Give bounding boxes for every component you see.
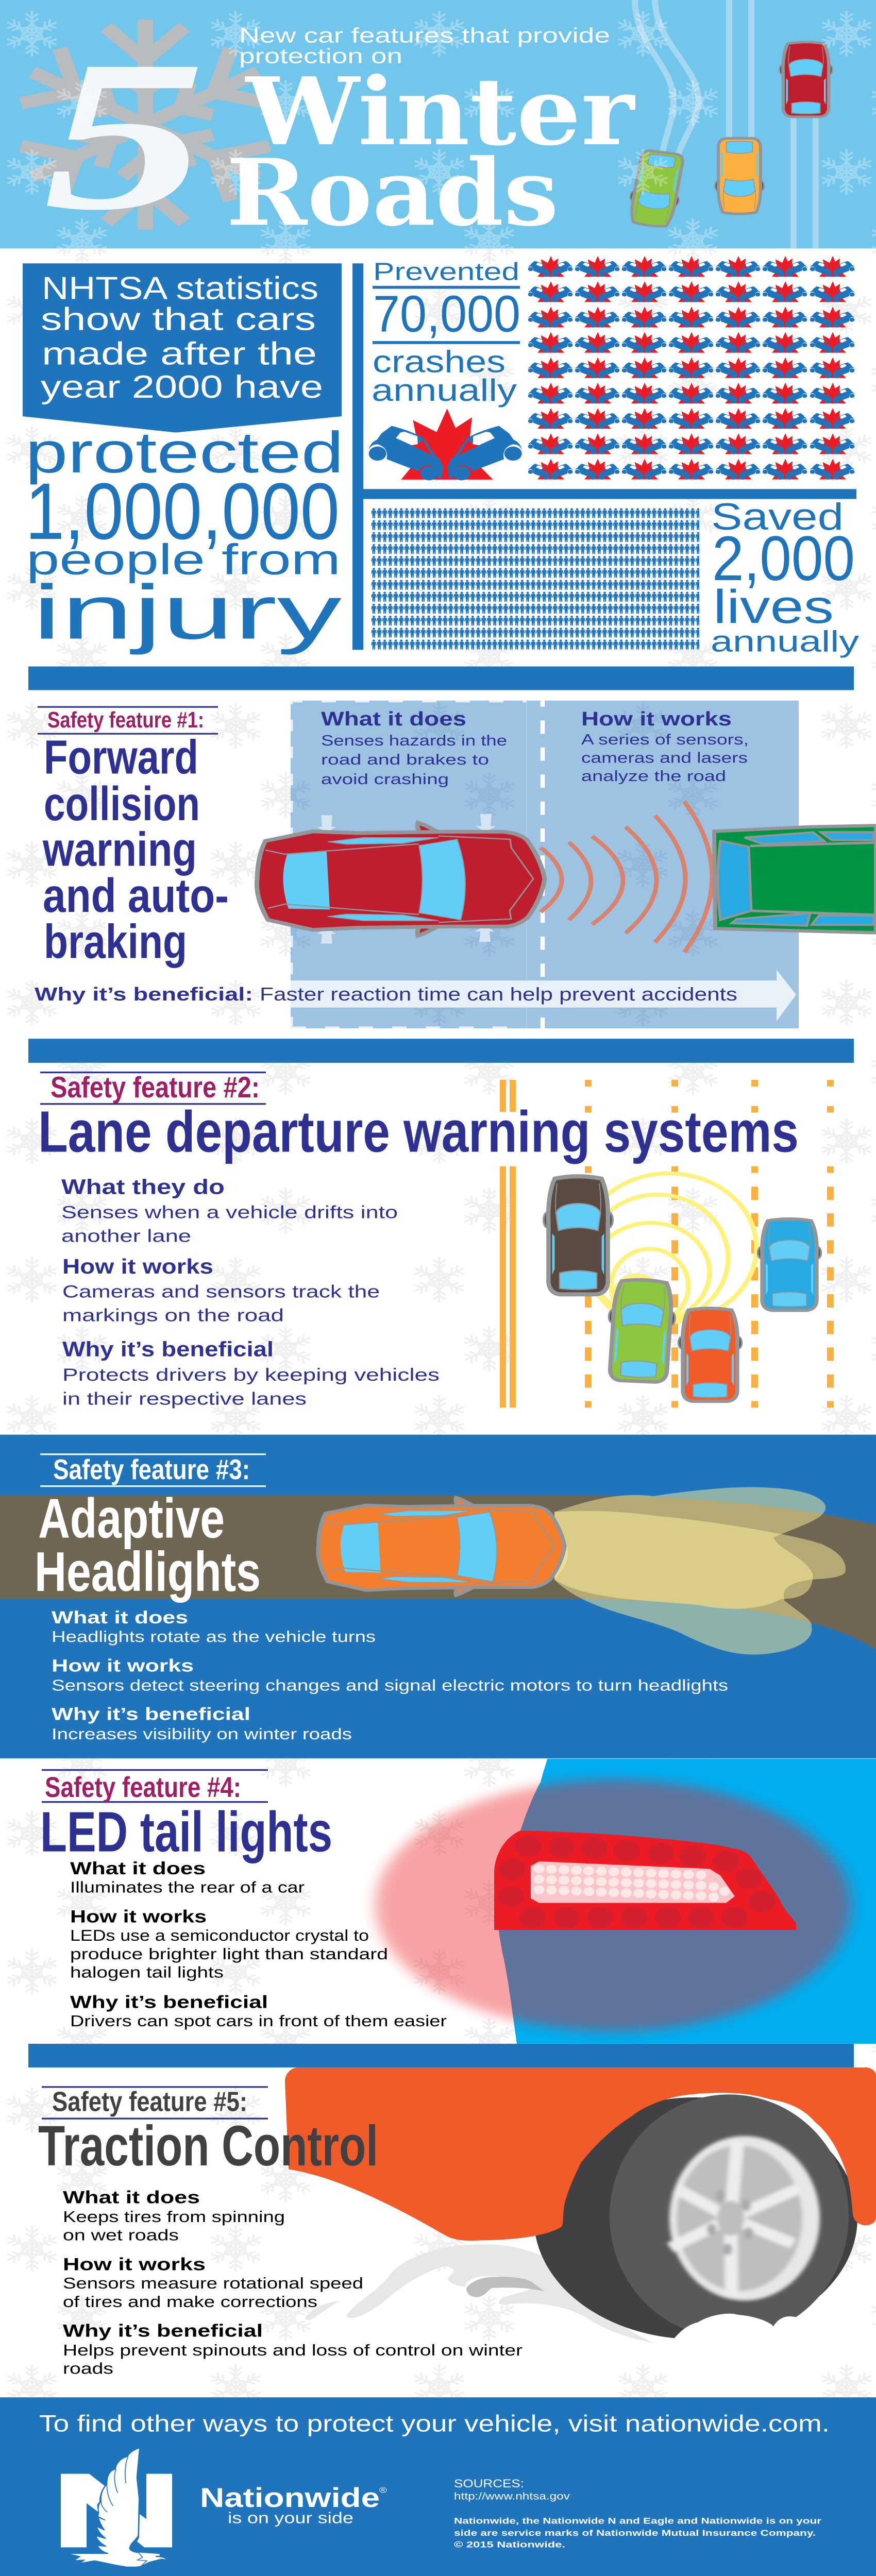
- logo: wordmark: [200, 2482, 387, 2527]
- text: why it's beneficial: [52, 1705, 352, 1743]
- title: Winter Roads: [226, 57, 636, 247]
- heading: [42, 731, 229, 969]
- text: how it works: Sensors detect steering changes and signal electric motors to turn headlights: [52, 1677, 728, 1694]
- text: what it does: [321, 708, 507, 787]
- text: how it works: A series of sensors,: [581, 731, 749, 748]
- text: how it works: markings on the road: [62, 1306, 284, 1326]
- icon: large snowflake: [13, 20, 278, 230]
- icon: orange car: [678, 1308, 742, 1401]
- stat: 2,000 lives: annually: [711, 625, 860, 658]
- subtitle: New car features that provide: [239, 23, 610, 47]
- heading: [35, 1487, 261, 1603]
- text: what it does: road and brakes to: [321, 751, 489, 768]
- text: why it's beneficial: Drivers can spot cars in front of them easier: [70, 2012, 447, 2030]
- icon: green vehicle ahead: [714, 825, 876, 933]
- text: how it works: [63, 2255, 363, 2311]
- panel: statistics: [23, 256, 860, 658]
- stat: 70,000 crashes: crashes: [373, 344, 506, 379]
- panel: safety feature 1: [35, 701, 876, 1028]
- panel: safety feature 5: [38, 2067, 876, 2377]
- text: what it does: Headlights rotate as the vehicle turns: [52, 1628, 376, 1646]
- text: how it works: How it works: [63, 2255, 206, 2274]
- text: why it's beneficial: Helps prevent spinouts and loss of control on winter: [63, 2342, 523, 2359]
- call to action: To find other ways to protect your vehicle, visit nationwide.com.: [39, 2411, 830, 2436]
- warning signal rings: [581, 1173, 756, 1323]
- logo: wordmark: ®: [379, 2486, 387, 2495]
- text: how it works: How it works: [62, 1254, 213, 1278]
- icon: orange car: [715, 138, 764, 214]
- text: why it's beneficial: [70, 1992, 447, 2030]
- feature label: [42, 2086, 268, 2119]
- text: what it does: What it does: [321, 708, 466, 730]
- logo: Nationwide N and eagle: [61, 2448, 172, 2567]
- text: how it works: [52, 1656, 728, 1694]
- header panel: [0, 0, 876, 255]
- text: why it's beneficial: roads: [63, 2360, 113, 2377]
- icon: crash over maple leaf: [368, 409, 522, 480]
- text: what they do: What they do: [61, 1175, 225, 1199]
- title: Winter Roads: Roads: [226, 139, 559, 247]
- banner: NHTSA statistics: show that cars: [41, 301, 316, 337]
- snow spray: [305, 2244, 654, 2343]
- text: what it does: on wet roads: [63, 2227, 179, 2244]
- big statement: protected 1,000,000 people from injury: 1,000,000: [25, 467, 340, 556]
- road panel: [291, 701, 799, 1028]
- footer: [0, 2397, 876, 2576]
- text: why it's beneficial: in their respective lanes: [62, 1389, 307, 1409]
- text: what it does: Senses hazards in the: [321, 732, 507, 749]
- text: why it's beneficial: Why it’s beneficial: [70, 1992, 268, 2012]
- text: what it does: Illuminates the rear of a car: [70, 1879, 305, 1896]
- panel: safety feature 3: [0, 1435, 876, 1758]
- text: why it's beneficial: Faster reaction time can help prevent accidents: [260, 984, 737, 1005]
- divider band: [28, 2044, 854, 2067]
- stat: 70,000 crashes: 70,000: [373, 285, 520, 343]
- feature label: Safety feature #3:: [53, 1454, 250, 1485]
- curved road: [0, 1495, 876, 1650]
- panel: safety feature 4: [40, 1759, 876, 2044]
- banner: NHTSA statistics: year 2000 have: [41, 369, 323, 404]
- red glow: [375, 1780, 851, 2031]
- text: what they do: another lane: [61, 1226, 191, 1246]
- stat: 70,000 crashes: [372, 258, 520, 408]
- fender: [285, 2067, 876, 2241]
- dividers: [352, 263, 856, 650]
- banner: NHTSA statistics: NHTSA statistics: [42, 270, 318, 306]
- icon: green car: [625, 149, 687, 228]
- heading: Headlights: [35, 1540, 261, 1603]
- icon: blue car: [757, 1219, 821, 1310]
- big statement: protected 1,000,000 people from injury: [25, 420, 344, 655]
- lane markings: [500, 1080, 834, 1408]
- text: how it works: [70, 1907, 388, 1981]
- heading: Adaptive: [38, 1487, 225, 1550]
- icon: tire and wheel: [534, 2094, 876, 2352]
- text: how it works: halogen tail lights: [70, 1964, 224, 1981]
- panel: safety feature 2: [38, 1071, 834, 1409]
- text: why it's beneficial: Protects drivers by keeping vehicles: [62, 1365, 440, 1385]
- text: what they do: [61, 1175, 398, 1246]
- text: what it does: What it does: [70, 1859, 206, 1878]
- icon: orange car: [318, 1498, 565, 1595]
- text: how it works: How it works: [52, 1656, 194, 1675]
- big statement: protected 1,000,000 people from injury: protected: [25, 420, 344, 485]
- sources: http://www.nhtsa.gov: [454, 2490, 570, 2502]
- feature label: Safety feature #4:: [45, 1771, 241, 1803]
- feature label: Safety feature #1:: [47, 708, 204, 733]
- text: how it works: How it works: [70, 1907, 207, 1926]
- heading: Traction Control: [38, 2114, 378, 2178]
- text: how it works: analyze the road: [581, 767, 726, 784]
- big statement: protected 1,000,000 people from injury: people from: [26, 535, 341, 584]
- icon grid: crashes: [528, 256, 855, 480]
- stat: 2,000 lives: [711, 496, 860, 658]
- arrow: benefit: [291, 970, 796, 1021]
- banner: NHTSA statistics: [23, 263, 342, 433]
- icon: red car: [779, 42, 833, 117]
- legal text: Nationwide, the Nationwide N and Eagle and Nationwide is on your: [454, 2516, 822, 2526]
- text: what it does: [70, 1859, 305, 1896]
- feature label: Safety feature #5:: [52, 2086, 247, 2117]
- feature label: [40, 1071, 266, 1104]
- text: why it's beneficial: Why it’s beneficial: [62, 1337, 274, 1361]
- feature label: [38, 707, 218, 734]
- text: what it does: What it does: [52, 1608, 188, 1628]
- text: what it does: [52, 1608, 376, 1646]
- heading: Forward: [44, 731, 198, 784]
- legal text: side are service marks of Nationwide Mutual Insurance Company.: [454, 2529, 816, 2538]
- heading: collision: [44, 777, 200, 831]
- text: why it's beneficial: Why it’s beneficial:: [35, 984, 253, 1005]
- icon: brown car: [544, 1176, 613, 1294]
- legal text: © 2015 Nationwide.: [454, 2540, 565, 2550]
- stat: 2,000 lives: Saved: [711, 496, 844, 538]
- text: why it's beneficial: Increases visibility on winter roads: [52, 1725, 352, 1743]
- heading: braking: [44, 915, 187, 969]
- divider band: [28, 1039, 854, 1063]
- text: why it's beneficial: [35, 984, 737, 1005]
- icon: tail light: [494, 1831, 796, 1930]
- sensor waves: [541, 802, 712, 952]
- text: how it works: [581, 708, 749, 784]
- legal text: [454, 2516, 822, 2550]
- headlight beams: [554, 1487, 846, 1655]
- small arrows around car: [317, 814, 496, 943]
- text: what it does: What it does: [63, 2188, 200, 2208]
- text: why it's beneficial: [62, 1337, 440, 1409]
- stat: 70,000 crashes: Prevented: [373, 258, 519, 285]
- feature label: [40, 1454, 266, 1486]
- number five: 5: [43, 16, 206, 255]
- text: how it works: produce brighter light than standard: [70, 1946, 388, 1963]
- stat: 70,000 crashes: annually: [372, 373, 517, 408]
- stat: 2,000 lives: lives: [713, 580, 834, 633]
- subtitle: protection on: [239, 44, 402, 67]
- text: why it's beneficial: Why it’s beneficial: [52, 1705, 250, 1724]
- sources: SOURCES:: [454, 2478, 524, 2490]
- big statement: protected 1,000,000 people from injury: injury: [32, 569, 342, 655]
- text: how it works: [62, 1254, 380, 1326]
- banner: NHTSA statistics: made after the: [42, 335, 317, 371]
- text: how it works: Cameras and sensors track the: [62, 1282, 380, 1302]
- text: what it does: [63, 2188, 285, 2244]
- title: Winter Roads: Winter: [245, 57, 636, 166]
- text: how it works: LEDs use a semiconductor crystal to: [70, 1927, 369, 1944]
- text: why it's beneficial: Why it’s beneficial: [63, 2321, 263, 2341]
- car body panel: [495, 1759, 876, 2044]
- heading: LED tail lights: [40, 1800, 332, 1864]
- text: how it works: How it works: [581, 708, 732, 730]
- text: how it works: Sensors measure rotational speed: [63, 2275, 363, 2292]
- icon: green car: [604, 1279, 678, 1383]
- heading: warning: [42, 823, 197, 876]
- logo: wordmark: Nationwide: [200, 2482, 380, 2513]
- text: how it works: cameras and lasers: [581, 749, 748, 766]
- text: how it works: of tires and make corrections: [63, 2294, 317, 2311]
- feature label: Safety feature #2:: [50, 1071, 260, 1104]
- text: why it's beneficial: [63, 2321, 523, 2377]
- divider band: [28, 667, 854, 690]
- icon: red car: [257, 823, 545, 936]
- tire tracks: [635, 0, 816, 248]
- text: what they do: Senses when a vehicle drifts into: [61, 1202, 398, 1223]
- subtitle: [239, 23, 610, 67]
- icon grid: people: [371, 508, 699, 652]
- logo: wordmark: is on your side: [228, 2510, 353, 2527]
- sources: [454, 2478, 570, 2502]
- text: what it does: avoid crashing: [321, 770, 449, 787]
- text: what it does: Keeps tires from spinning: [63, 2208, 285, 2226]
- heading: and auto-: [43, 869, 229, 923]
